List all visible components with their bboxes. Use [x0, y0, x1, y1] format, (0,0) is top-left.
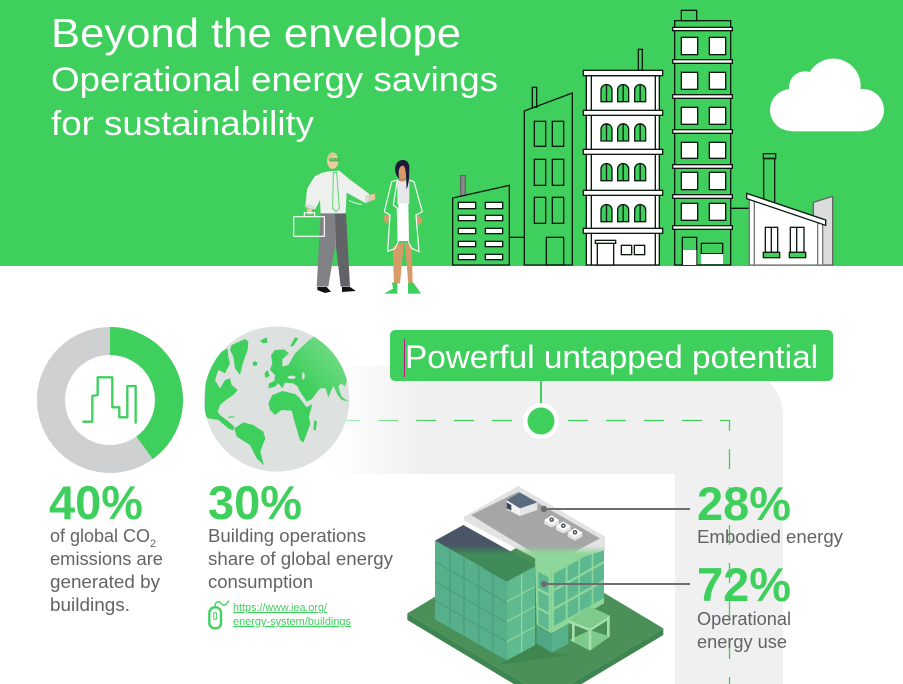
- icon: briefcase: [294, 213, 324, 236]
- stat: 28% embodied: [697, 477, 843, 547]
- main tower: [535, 538, 604, 653]
- Africa: [268, 391, 312, 443]
- North America: [204, 348, 238, 431]
- title: Operational energy savings: [51, 61, 498, 99]
- stat: 40% CO2: 2: [150, 538, 156, 550]
- stat: 72% operational: energy use: [697, 632, 787, 652]
- callout line: facade: [541, 581, 690, 587]
- grey connector band: [330, 366, 783, 684]
- stat: 28% embodied: 28%: [697, 477, 791, 530]
- illustration: isometric building: [407, 486, 663, 684]
- stat: 40% CO2: emissions are: [50, 549, 163, 569]
- title: for sustainability: [51, 105, 314, 143]
- connector node: [523, 381, 559, 439]
- illustration: two business people: [294, 152, 423, 294]
- stat: 30% energy: 30%: [208, 476, 302, 529]
- donut chart: 40%: [51, 341, 169, 459]
- woman in lab coat: [384, 160, 423, 294]
- callout line: roof: [541, 506, 690, 512]
- link: https://www.iea.org/: [233, 602, 328, 614]
- stat: 40% CO2: buildings.: [50, 595, 130, 615]
- icon: city skyline: [83, 377, 136, 423]
- stat: 40% CO2: of global CO: [50, 526, 150, 546]
- stat: 30% energy: consumption: [208, 572, 313, 592]
- icon: cloud: [770, 59, 884, 131]
- stat: 30% energy: [208, 476, 393, 592]
- dashed connector line: [340, 420, 730, 684]
- left wing: [435, 525, 535, 660]
- building: slanted tower: [524, 87, 572, 265]
- stat: 30% energy: Building operations: [208, 526, 366, 546]
- link: [233, 602, 351, 628]
- stat: 40% CO2: 40%: [49, 476, 143, 529]
- AC units: [544, 515, 582, 541]
- stat: 40% CO2: [49, 476, 163, 615]
- stat: 40% CO2: generated by: [50, 572, 160, 592]
- title: [51, 10, 498, 143]
- Greenland: [230, 339, 248, 375]
- building: white arched-window block: [583, 49, 663, 265]
- icon: globe: [204, 326, 352, 472]
- roof: [464, 486, 605, 567]
- South America: [234, 422, 265, 465]
- stat: 72% operational: Operational: [697, 609, 791, 629]
- building: small house with chimney: [747, 154, 833, 265]
- link: energy-system/buildings: [233, 616, 351, 628]
- entrance canopy: [569, 607, 610, 651]
- illustration: city buildings left: [453, 49, 663, 265]
- stat: 72% operational: [697, 558, 791, 652]
- man with briefcase: [294, 152, 375, 293]
- icon: mouse: [209, 601, 229, 628]
- heading: Powerful untapped potential: Powerful untapped potential: [405, 339, 818, 375]
- header background: [0, 0, 903, 266]
- Eurasia: [268, 336, 352, 402]
- building: low office: [453, 176, 524, 265]
- stat: 72% operational: 72%: [697, 558, 791, 611]
- illustration: city buildings right: [673, 10, 884, 265]
- roof box: [507, 500, 520, 516]
- stat: 30% energy: share of global energy: [208, 549, 393, 569]
- ground plate: [407, 544, 663, 684]
- title: Beyond the envelope: [51, 10, 461, 56]
- heading: Powerful untapped potential: [390, 330, 833, 381]
- building: tall green tower: [673, 10, 749, 265]
- stat: 28% embodied: Embodied energy: [697, 527, 843, 547]
